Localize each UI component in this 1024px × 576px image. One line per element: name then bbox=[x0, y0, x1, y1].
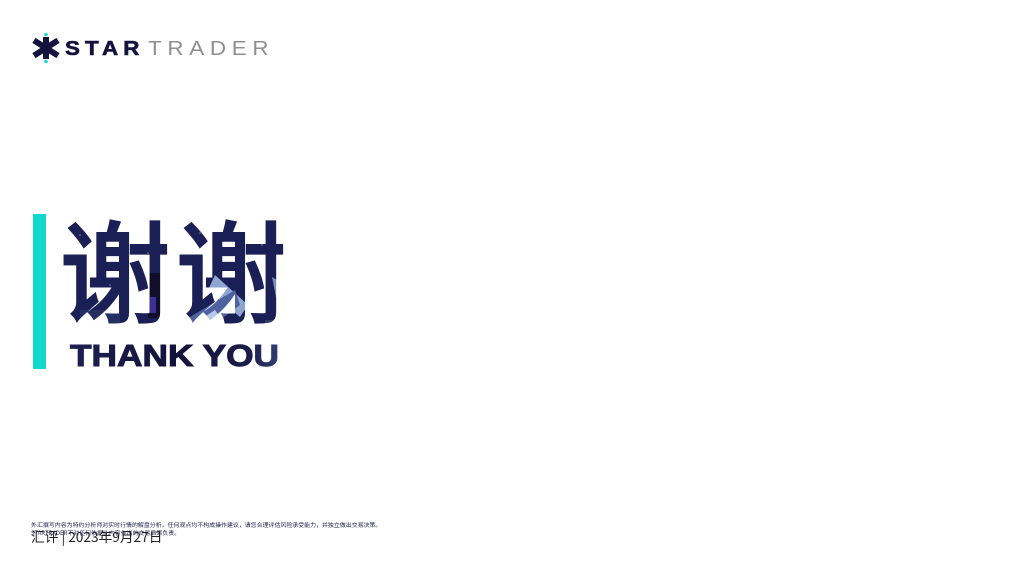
accent bar bbox=[33, 214, 46, 369]
title: thanks bbox=[60, 205, 286, 373]
logo: STARTRADER bbox=[32, 32, 272, 64]
heading: THANK YOU: THANK YOU bbox=[70, 338, 279, 373]
disclaimer text: STARTRADER不对任何依据此内容作出的交易后果负责。 bbox=[31, 528, 180, 537]
date footer: 汇评 | 2023年9月27日 bbox=[31, 526, 162, 546]
logo wordmark: TRADER: TRADER bbox=[148, 38, 272, 60]
icon: star mark bbox=[36, 33, 56, 63]
disclaimer text: 外汇撰写内容为特约分析师对实时行情的解盘分析，任何观点均不构成操作建议，请您合理评估风险承受能力，并独立做出交易决策。 bbox=[31, 520, 381, 529]
logo wordmark: STAR: STAR bbox=[65, 38, 144, 60]
disclaimer text bbox=[31, 520, 381, 537]
